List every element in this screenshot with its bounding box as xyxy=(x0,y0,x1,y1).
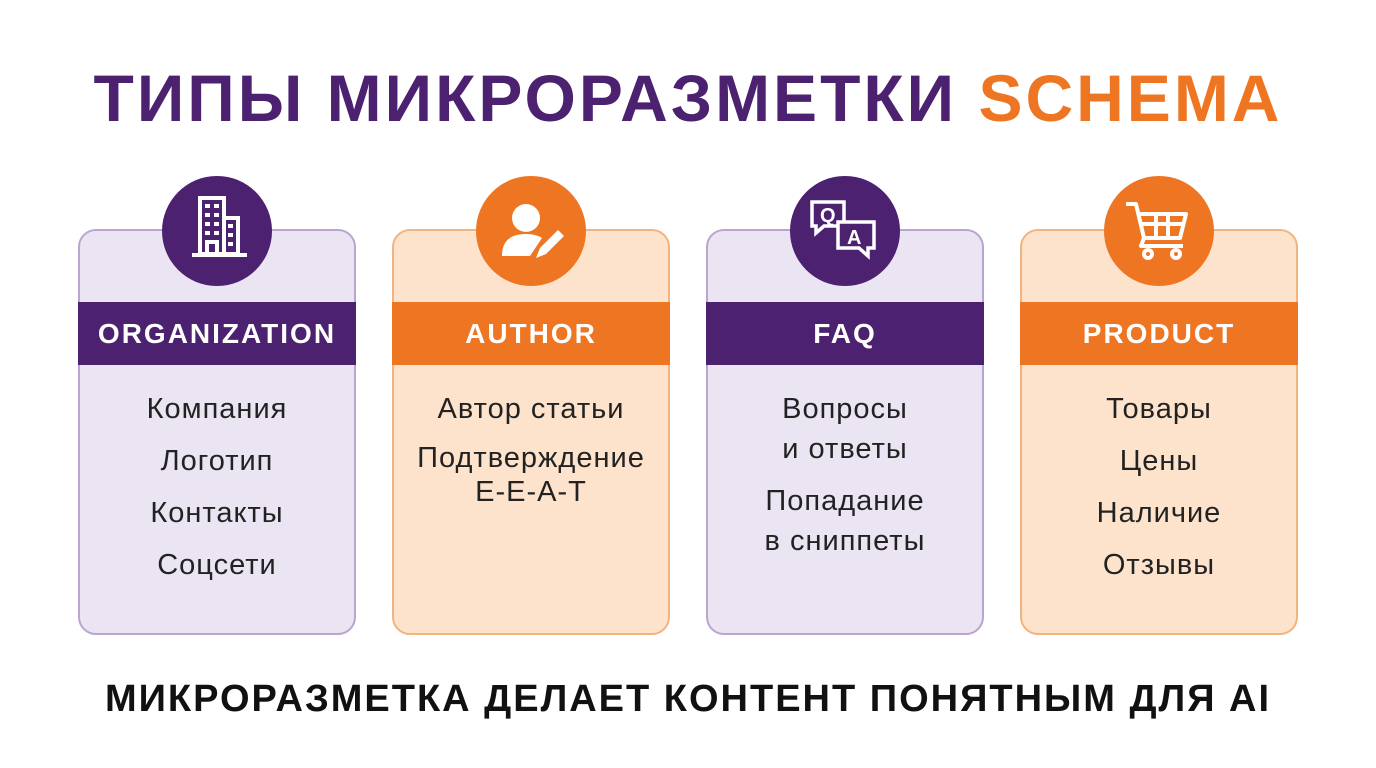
text: faq items xyxy=(765,393,925,557)
text: author items: Автор статьи xyxy=(438,393,624,425)
text: author items: Подтверждение xyxy=(417,442,645,474)
text: faq items: Попадание xyxy=(765,485,925,517)
text: organization items: Соцсети xyxy=(157,549,277,581)
text: organization items: Логотип xyxy=(161,445,273,477)
header: AUTHOR: AUTHOR xyxy=(465,318,597,349)
text: product items: Отзывы xyxy=(1103,549,1215,581)
icon: building xyxy=(162,176,272,286)
footer caption: МИКРОРАЗМЕТКА ДЕЛАЕТ КОНТЕНТ ПОНЯТНЫМ ДЛЯ AI xyxy=(105,678,1271,720)
text: product items: Товары xyxy=(1106,393,1212,425)
text: product items: Цены xyxy=(1120,445,1198,477)
icon: Q&A bubbles: A xyxy=(847,227,861,249)
text: faq items: Вопросы xyxy=(782,393,908,425)
icon: shopping cart xyxy=(1104,176,1214,286)
header: PRODUCT xyxy=(1020,302,1298,365)
text: organization items: Компания xyxy=(147,393,287,425)
text: organization items xyxy=(147,393,287,581)
text: product items xyxy=(1097,393,1221,581)
text: organization items: Контакты xyxy=(150,497,284,529)
header: FAQ: FAQ xyxy=(813,318,877,349)
panel: product xyxy=(1020,229,1298,635)
panel: faq xyxy=(706,229,984,635)
icon: Q&A bubbles: Q xyxy=(820,205,836,227)
text: faq items: в сниппеты xyxy=(765,525,925,557)
header: ORGANIZATION xyxy=(78,302,356,365)
text: author items: E-E-A-T xyxy=(475,476,587,508)
text: author items xyxy=(417,393,645,508)
header: AUTHOR xyxy=(392,302,670,365)
header: PRODUCT: PRODUCT xyxy=(1083,318,1235,349)
title: ТИПЫ МИКРОРАЗМЕТКИ SCHEMA xyxy=(94,61,1282,135)
text: faq items: и ответы xyxy=(782,433,908,465)
panel: author xyxy=(392,229,670,635)
icon: Q&A bubbles xyxy=(790,176,900,286)
text: product items: Наличие xyxy=(1097,497,1221,529)
header: FAQ xyxy=(706,302,984,365)
panel: organization xyxy=(78,229,356,635)
icon: author with pen xyxy=(476,176,586,286)
header: ORGANIZATION: ORGANIZATION xyxy=(98,318,336,349)
